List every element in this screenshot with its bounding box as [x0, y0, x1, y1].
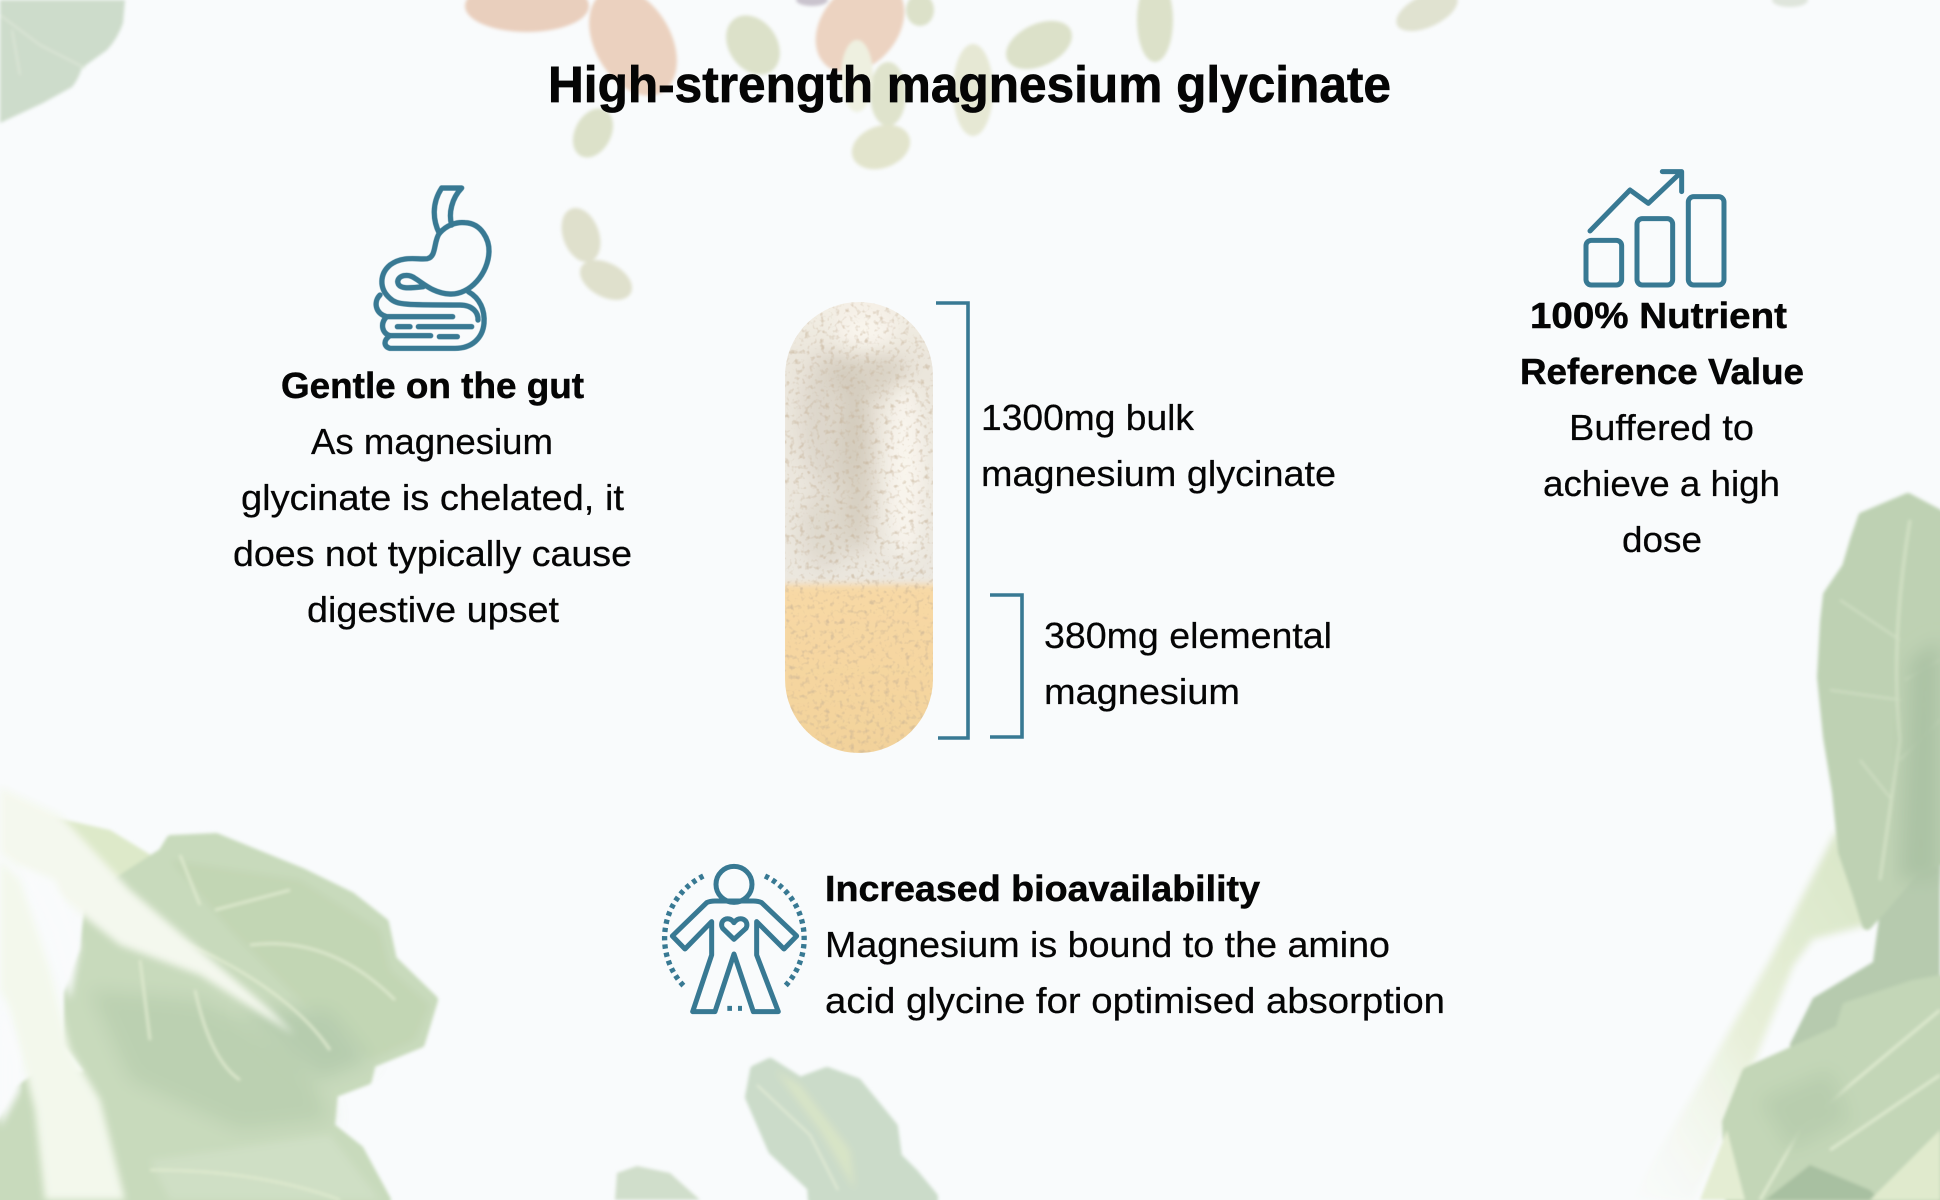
label: 1300mg bulk: magnesium glycinate — [981, 453, 1336, 494]
icon: rising bar chart — [1586, 172, 1724, 285]
dark rear leaf — [1790, 800, 1940, 1075]
upper leaf — [1822, 498, 1940, 925]
bottom-left cabbage leaf — [0, 787, 433, 1200]
text: nutrient reference value: Reference Value — [1520, 351, 1804, 392]
main stem — [0, 787, 295, 1035]
text: gentle on the gut: Gentle on the gut — [281, 365, 584, 406]
top-right leaf tip — [1772, 0, 1808, 7]
capsule powder speckle — [785, 302, 933, 753]
top-left leaf — [0, 0, 125, 123]
bottom-right chard leaves — [1630, 498, 1940, 1200]
almond — [571, 0, 695, 111]
capsule: white powder half — [780, 296, 940, 585]
icon: stomach and intestines — [376, 188, 489, 348]
pumpkin seeds — [555, 0, 1464, 308]
gap behind stem — [18, 865, 80, 1000]
icon: human body with heart — [665, 866, 804, 1012]
text: nutrient reference value: Buffered to — [1569, 407, 1754, 448]
stem — [1630, 829, 1867, 1200]
text: gentle on the gut: As magnesium — [311, 421, 553, 462]
text: increased bioavailability: Magnesium is bound to the amino — [825, 924, 1390, 965]
text: gentle on the gut: does not typically cause — [233, 533, 632, 574]
dark nut — [796, 0, 828, 6]
label: 380mg elemental: magnesium — [1044, 671, 1240, 712]
text: increased bioavailability: acid glycine for optimised absorption — [825, 980, 1445, 1021]
text: nutrient reference value: achieve a high — [1543, 463, 1780, 504]
text: gentle on the gut: digestive upset — [307, 589, 559, 630]
text: nutrient reference value: 100% Nutrient — [1530, 295, 1787, 336]
label: 1300mg bulk: 1300mg bulk — [981, 397, 1195, 438]
text: nutrient reference value — [1520, 295, 1804, 560]
front lower leaf — [1727, 980, 1940, 1200]
label: 1300mg bulk — [981, 397, 1336, 494]
text: gentle on the gut: glycinate is chelated, it — [241, 477, 624, 518]
bottom light stalk — [1870, 1130, 1940, 1200]
text: increased bioavailability — [825, 868, 1445, 1021]
capsule: yellow powder half — [780, 584, 940, 759]
almond — [465, 0, 589, 32]
bracket: elemental portion — [990, 595, 1022, 737]
label: 380mg elemental: 380mg elemental — [1044, 615, 1332, 656]
text: nutrient reference value: dose — [1622, 519, 1702, 560]
bottom dark leaf — [1765, 1165, 1880, 1200]
text: increased bioavailability: Increased bioavailability — [825, 868, 1260, 909]
bottom-centre spinach leaves — [615, 1063, 933, 1200]
almond — [797, 0, 923, 90]
text: gentle on the gut — [233, 365, 632, 630]
second stem — [0, 860, 125, 1200]
title: High-strength magnesium glycinate — [548, 56, 1391, 113]
capsule image — [780, 296, 940, 759]
bracket: whole capsule — [936, 303, 968, 738]
label: 380mg elemental — [1044, 615, 1332, 712]
